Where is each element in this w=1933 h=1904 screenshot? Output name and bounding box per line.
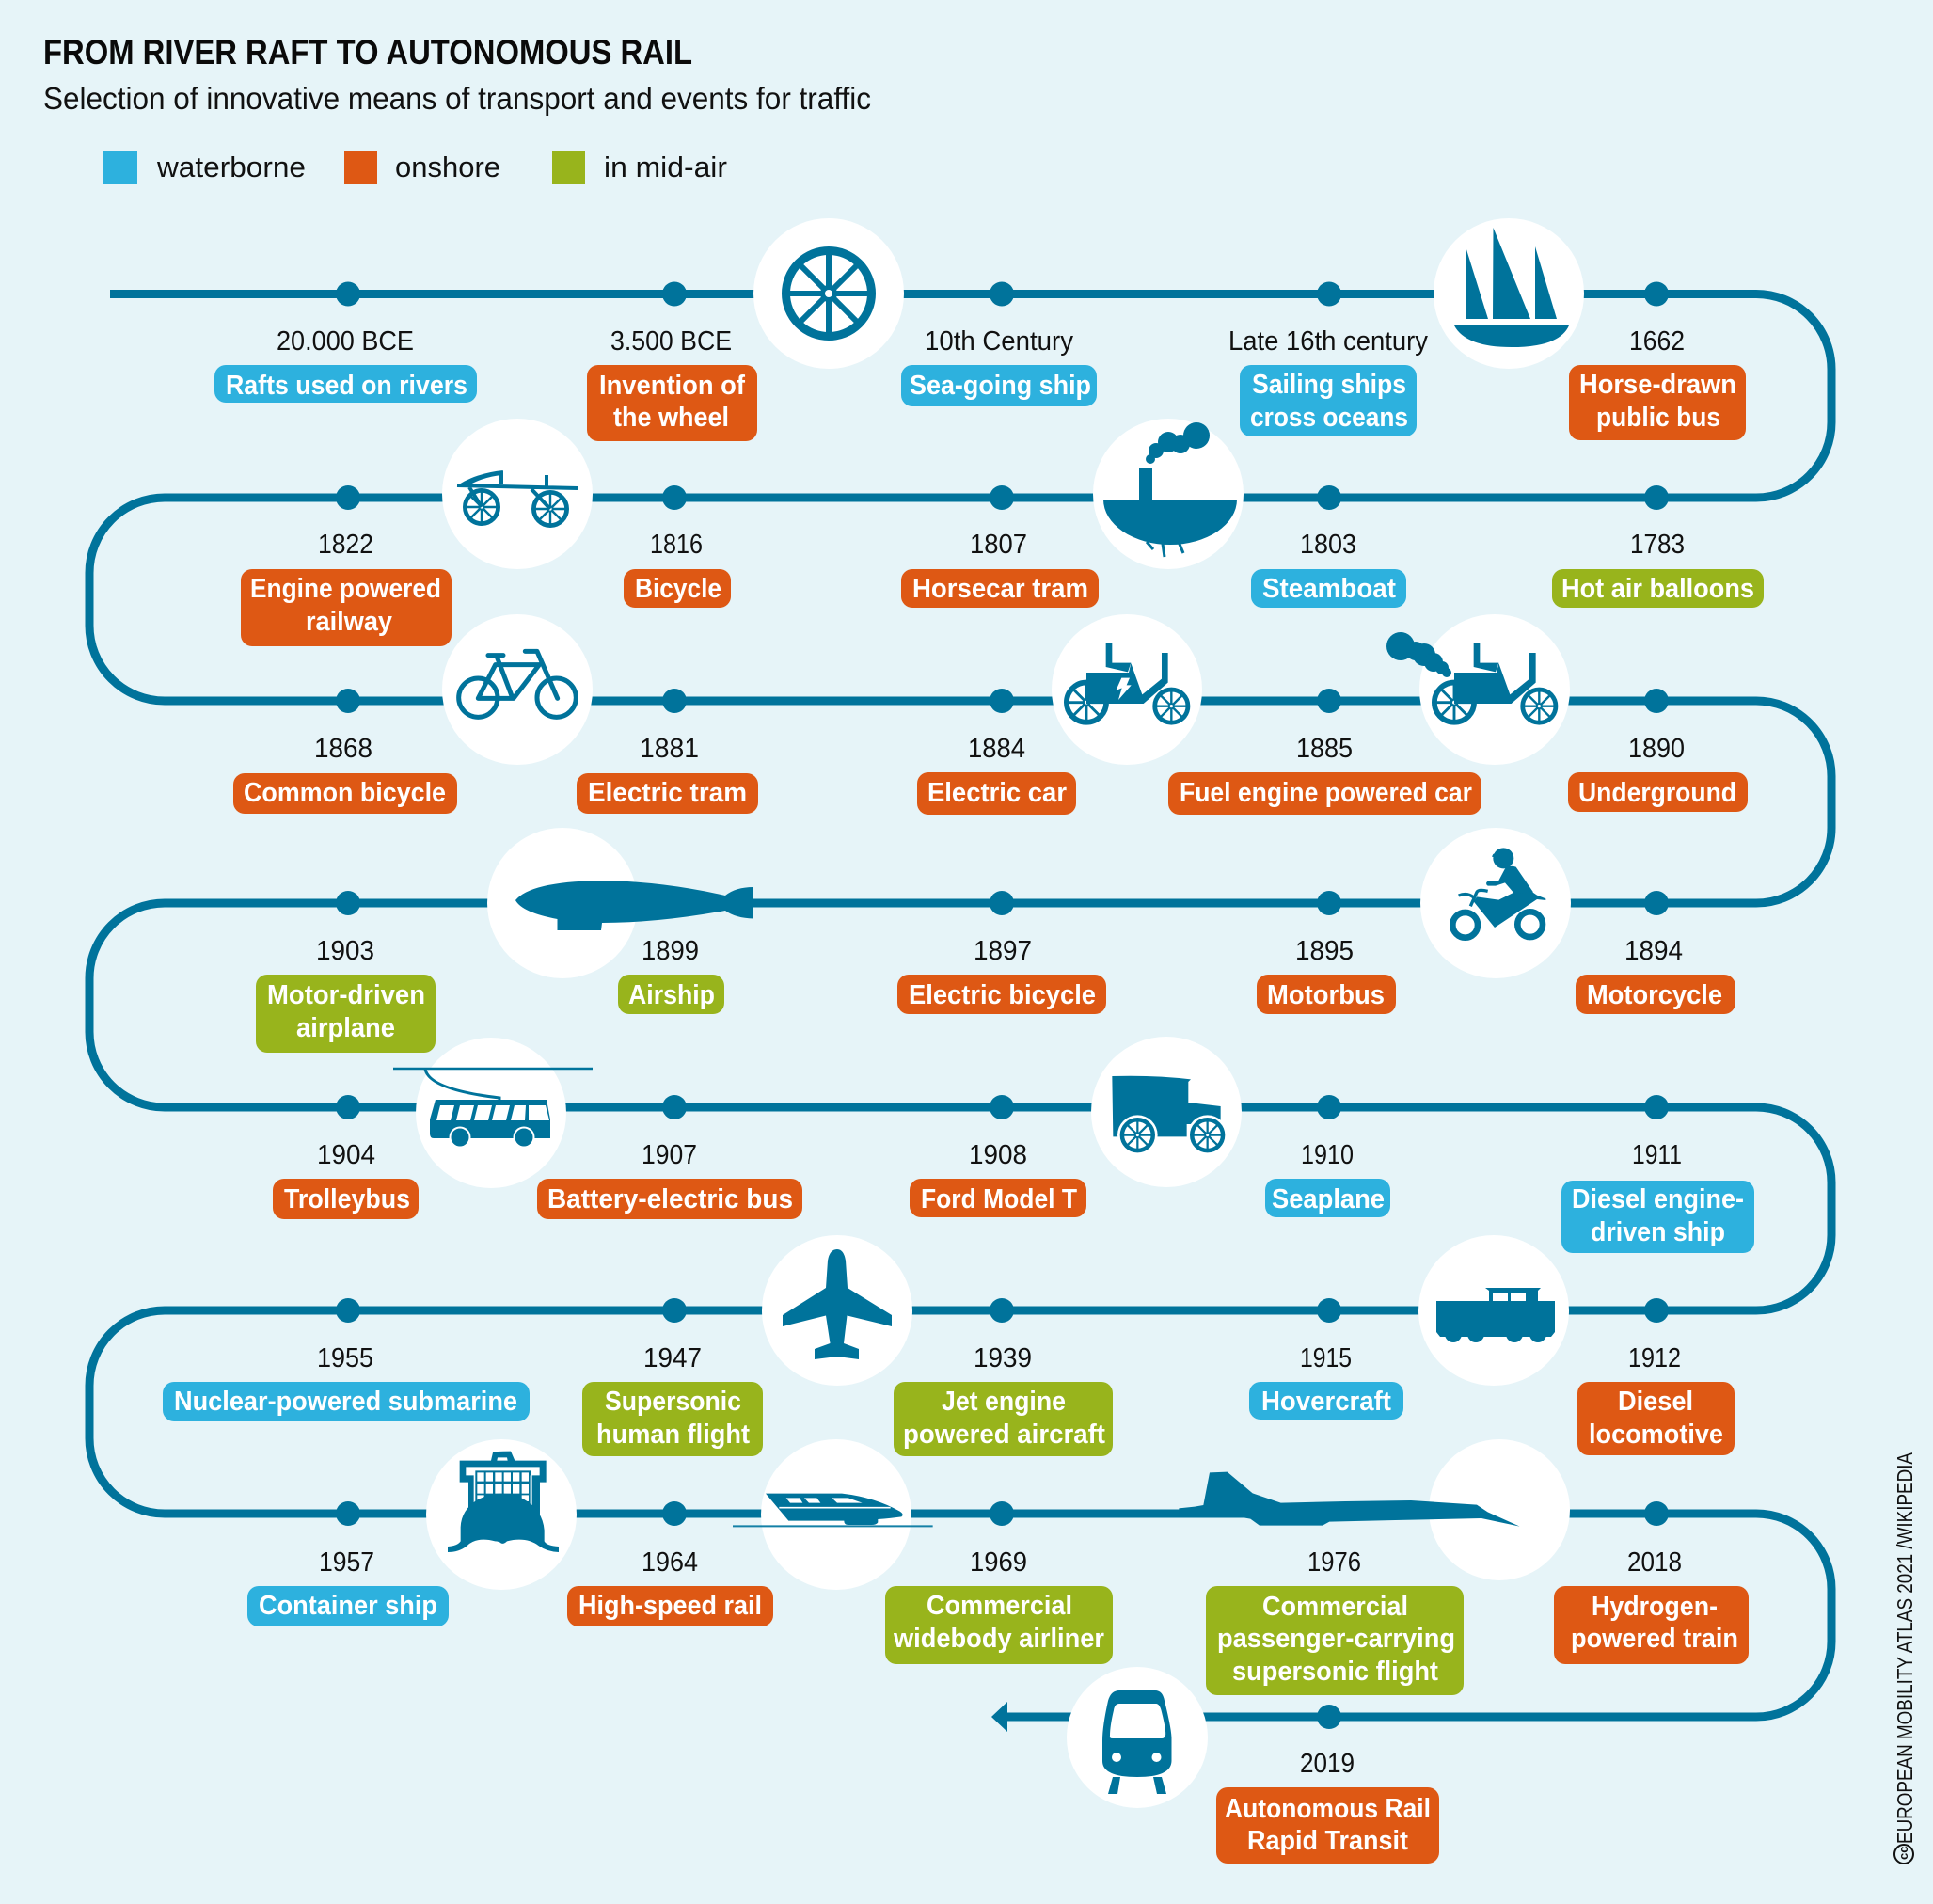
icon: concorde xyxy=(1179,1439,1570,1580)
1912: diesel locomotive: locomotive xyxy=(1589,1420,1723,1450)
legend: in mid-air xyxy=(604,151,727,183)
1939: jet engine aircraft xyxy=(894,1343,1113,1456)
legend: onshore xyxy=(395,151,500,183)
1890: underground: Underground xyxy=(1578,778,1736,808)
2019: autonomous rail milestone: 2019 xyxy=(1300,1749,1355,1779)
1662: horse-drawn bus: Horse-drawn xyxy=(1579,370,1736,400)
3.500 BCE: wheel: Invention of xyxy=(599,371,745,401)
1910: seaplane xyxy=(1265,1140,1390,1217)
late 16th century: sailing ships: cross oceans xyxy=(1250,403,1408,433)
1807: horsecar tram: 1807 xyxy=(970,530,1027,560)
2018: hydrogen train: 2018 xyxy=(1627,1547,1682,1578)
1904: trolleybus: Trolleybus xyxy=(284,1184,410,1214)
1911: diesel engine-driven ship: driven ship xyxy=(1591,1217,1725,1247)
1910: seaplane: 1910 xyxy=(1301,1140,1354,1170)
arrow head xyxy=(991,1702,1007,1732)
row 4 milestones xyxy=(256,936,1735,1053)
1822: engine powered railway: 1822 xyxy=(318,530,373,560)
1947: supersonic human flight: human flight xyxy=(596,1420,750,1450)
1868: common bicycle xyxy=(233,734,457,814)
1947: supersonic human flight: 1947 xyxy=(643,1343,702,1373)
1957: container ship: 1957 xyxy=(319,1547,374,1578)
1903: motor-driven airplane: 1903 xyxy=(316,936,374,966)
1890: underground xyxy=(1568,734,1748,812)
icon: fuel engine car xyxy=(1386,614,1570,765)
1885: fuel engine car: 1885 xyxy=(1296,734,1353,764)
1662: horse-drawn bus xyxy=(1569,326,1746,440)
1911: diesel engine-driven ship xyxy=(1561,1140,1754,1253)
1969: widebody airliner xyxy=(885,1547,1113,1664)
row 3 milestones xyxy=(233,734,1748,815)
credit: EUROPEAN MOBILITY ATLAS 2021 /WIKIPEDIA xyxy=(1893,1452,1917,1844)
1881: electric tram: 1881 xyxy=(640,734,699,764)
1912: diesel locomotive: 1912 xyxy=(1628,1343,1681,1373)
1910: seaplane: Seaplane xyxy=(1272,1184,1385,1214)
1908: ford model t xyxy=(910,1140,1086,1217)
1807: horsecar tram xyxy=(901,530,1099,608)
1911: diesel engine-driven ship: Diesel engine- xyxy=(1572,1184,1744,1214)
1899: airship xyxy=(618,936,724,1014)
20.000 BCE: rafts: 20.000 BCE xyxy=(277,326,414,357)
1957: container ship: Container ship xyxy=(259,1591,437,1621)
legend xyxy=(103,151,727,184)
subtitle: Selection of innovative means of transport and events for traffic xyxy=(43,81,871,116)
1969: widebody airliner: Commercial xyxy=(927,1591,1072,1621)
icon: diesel locomotive xyxy=(1418,1235,1569,1386)
1890: underground: 1890 xyxy=(1628,734,1685,764)
1807: horsecar tram: Horsecar tram xyxy=(912,574,1088,604)
1947: supersonic human flight xyxy=(582,1343,763,1456)
1964: high-speed rail xyxy=(567,1547,773,1626)
1895: motorbus: 1895 xyxy=(1295,936,1354,966)
1885: fuel engine car xyxy=(1168,734,1481,815)
1897: electric bicycle: 1897 xyxy=(974,936,1032,966)
1868: common bicycle: 1868 xyxy=(314,734,372,764)
late 16th century: sailing ships: Sailing ships xyxy=(1252,370,1406,400)
1955: nuclear submarine: 1955 xyxy=(317,1343,373,1373)
1912: diesel locomotive xyxy=(1577,1343,1735,1455)
icon: jet airplane xyxy=(762,1235,912,1386)
icon: airship xyxy=(487,828,753,978)
icon: high-speed train xyxy=(733,1439,933,1590)
1899: airship: Airship xyxy=(628,980,715,1010)
icon: motorcycle xyxy=(1420,828,1571,978)
1894: motorcycle xyxy=(1576,936,1735,1014)
1894: motorcycle: Motorcycle xyxy=(1587,980,1722,1010)
1939: jet engine aircraft: Jet engine xyxy=(942,1387,1066,1417)
1976: supersonic passenger flight: supersonic flight xyxy=(1232,1657,1438,1687)
1976: supersonic passenger flight: passenger-carrying xyxy=(1217,1624,1455,1654)
1915: hovercraft: 1915 xyxy=(1300,1343,1352,1373)
2018: hydrogen train: powered train xyxy=(1571,1624,1738,1654)
1803: steamboat: Steamboat xyxy=(1262,574,1396,604)
icon: trolleybus xyxy=(393,1038,593,1188)
1662: horse-drawn bus: 1662 xyxy=(1629,326,1685,357)
1904: trolleybus xyxy=(273,1140,419,1219)
1816: bicycle xyxy=(624,530,731,608)
1816: bicycle: Bicycle xyxy=(635,574,721,604)
1884: electric car: 1884 xyxy=(968,734,1025,764)
timeline dots xyxy=(336,282,1669,1729)
1955: nuclear submarine xyxy=(163,1343,530,1421)
1803: steamboat xyxy=(1251,530,1406,608)
1939: jet engine aircraft: 1939 xyxy=(974,1343,1032,1373)
1969: widebody airliner: 1969 xyxy=(970,1547,1027,1578)
1803: steamboat: 1803 xyxy=(1300,530,1356,560)
1939: jet engine aircraft: powered aircraft xyxy=(903,1420,1105,1450)
1907: battery-electric bus: 1907 xyxy=(642,1140,697,1170)
1908: ford model t: Ford Model T xyxy=(921,1184,1077,1214)
1976: supersonic passenger flight: 1976 xyxy=(1307,1547,1361,1578)
icon: ford model t xyxy=(1091,1037,1242,1187)
legend: waterborne xyxy=(156,151,306,183)
icon: draisine railway xyxy=(442,419,593,569)
1899: airship: 1899 xyxy=(642,936,699,966)
1907: battery-electric bus: Battery-electric bus xyxy=(547,1184,793,1214)
3.500 BCE: wheel: 3.500 BCE xyxy=(610,326,732,357)
3.500 BCE: wheel: the wheel xyxy=(613,403,729,433)
1915: hovercraft xyxy=(1249,1343,1403,1420)
1915: hovercraft: Hovercraft xyxy=(1261,1387,1391,1417)
icon: container ship xyxy=(426,1439,577,1590)
1895: motorbus: Motorbus xyxy=(1267,980,1385,1010)
1911: diesel engine-driven ship: 1911 xyxy=(1632,1140,1682,1170)
1957: container ship xyxy=(247,1547,449,1626)
row 2 milestones xyxy=(241,530,1764,646)
icon: wheel xyxy=(753,218,904,369)
1884: electric car xyxy=(917,734,1076,815)
row 5 milestones xyxy=(273,1140,1754,1253)
1816: bicycle: 1816 xyxy=(650,530,703,560)
20.000 BCE: rafts: Rafts used on rivers xyxy=(226,371,467,401)
2018: hydrogen train xyxy=(1554,1547,1749,1664)
1895: motorbus xyxy=(1257,936,1396,1014)
1903: motor-driven airplane xyxy=(256,936,436,1053)
icon: electric car xyxy=(1052,614,1202,765)
icon: sailing ship xyxy=(1434,218,1584,369)
1912: diesel locomotive: Diesel xyxy=(1618,1387,1693,1417)
10th century: sea-going ship: 10th Century xyxy=(925,326,1073,357)
icon: bicycle xyxy=(442,614,593,765)
row 7 milestones xyxy=(247,1547,1749,1695)
title: FROM RIVER RAFT TO AUTONOMOUS RAIL xyxy=(43,33,692,71)
1885: fuel engine car: Fuel engine powered car xyxy=(1180,778,1472,808)
1662: horse-drawn bus: public bus xyxy=(1596,403,1720,433)
1908: ford model t: 1908 xyxy=(969,1140,1027,1170)
late 16th century: sailing ships xyxy=(1228,326,1428,436)
1955: nuclear submarine: Nuclear-powered submarine xyxy=(174,1387,517,1417)
icon: steamboat xyxy=(1093,419,1244,569)
1868: common bicycle: Common bicycle xyxy=(244,778,446,808)
credit: cc xyxy=(1896,1847,1910,1860)
2018: hydrogen train: Hydrogen- xyxy=(1592,1592,1718,1622)
1822: engine powered railway: Engine powered xyxy=(250,574,441,604)
3.500 BCE: wheel xyxy=(587,326,757,441)
1907: battery-electric bus xyxy=(537,1140,802,1219)
1976: supersonic passenger flight xyxy=(1206,1547,1464,1695)
row 1 milestones xyxy=(214,326,1746,441)
1783: hot air balloons xyxy=(1552,530,1764,608)
late 16th century: sailing ships: Late 16th century xyxy=(1228,326,1428,357)
10th century: sea-going ship xyxy=(901,326,1097,406)
1947: supersonic human flight: Supersonic xyxy=(605,1387,741,1417)
1822: engine powered railway xyxy=(241,530,452,646)
timeline line xyxy=(89,294,1831,1717)
1964: high-speed rail: High-speed rail xyxy=(578,1591,762,1621)
1903: motor-driven airplane: airplane xyxy=(296,1013,395,1043)
20.000 BCE: rafts xyxy=(214,326,477,403)
1881: electric tram xyxy=(577,734,758,814)
1881: electric tram: Electric tram xyxy=(588,778,747,808)
1903: motor-driven airplane: Motor-driven xyxy=(267,980,425,1010)
2019: autonomous rail milestone xyxy=(1216,1749,1439,1864)
1897: electric bicycle: Electric bicycle xyxy=(909,980,1096,1010)
1904: trolleybus: 1904 xyxy=(317,1140,375,1170)
row 6 milestones xyxy=(163,1343,1735,1456)
1976: supersonic passenger flight: Commercial xyxy=(1262,1592,1408,1622)
icon: autonomous train xyxy=(1067,1667,1208,1808)
1783: hot air balloons: Hot air balloons xyxy=(1561,574,1754,604)
1894: motorcycle: 1894 xyxy=(1624,936,1683,966)
2019: autonomous rail milestone: Rapid Transit xyxy=(1247,1826,1408,1856)
2019: autonomous rail milestone: Autonomous Rail xyxy=(1225,1794,1431,1824)
1783: hot air balloons: 1783 xyxy=(1630,530,1685,560)
1822: engine powered railway: railway xyxy=(306,607,392,637)
1969: widebody airliner: widebody airliner xyxy=(893,1624,1104,1654)
1964: high-speed rail: 1964 xyxy=(642,1547,698,1578)
1884: electric car: Electric car xyxy=(927,778,1067,808)
10th century: sea-going ship: Sea-going ship xyxy=(910,371,1091,401)
1897: electric bicycle xyxy=(897,936,1106,1014)
